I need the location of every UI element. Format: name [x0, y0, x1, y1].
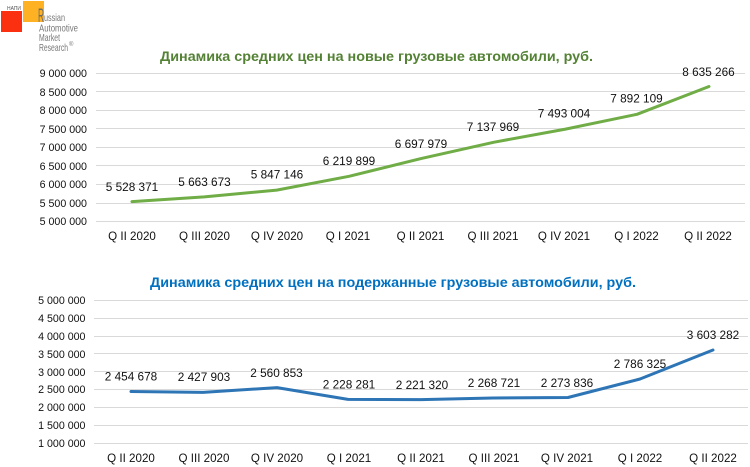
y axis labels: new trucks: 9 000 000: [40, 68, 87, 80]
x axis labels: used trucks: Q IV 2021: [541, 452, 593, 465]
x axis labels: new trucks: Q II 2020: [108, 230, 156, 243]
y axis labels: new trucks: 5 000 000: [40, 216, 87, 228]
x axis labels: new trucks: [108, 230, 732, 243]
panel: used trucks chart: [38, 274, 748, 465]
data labels: new trucks: 6 219 899: [323, 154, 375, 168]
heading: new trucks: Динамика средних цен на новые грузовые автомобили, руб.: [160, 48, 593, 64]
y axis labels: new trucks: 8 000 000: [40, 105, 87, 117]
x axis labels: new trucks: Q IV 2020: [251, 230, 303, 243]
x axis labels: new trucks: Q III 2020: [179, 230, 230, 243]
heading: used trucks: Динамика средних цен на подержанные грузовые автомобили, руб.: [150, 274, 636, 290]
data labels: new trucks: 7 892 109: [610, 92, 663, 106]
data labels: new trucks: 6 697 979: [395, 137, 447, 151]
y axis labels: used trucks: 1 500 000: [38, 420, 86, 432]
y axis labels: used trucks: 2 000 000: [38, 402, 86, 414]
data labels: new trucks: 5 663 673: [178, 175, 231, 189]
data labels: used trucks: 2 560 853: [250, 366, 303, 380]
line: used truck prices: [131, 350, 713, 400]
x axis labels: used trucks: [107, 452, 737, 465]
y axis labels: new trucks: 5 500 000: [40, 198, 87, 210]
y axis labels: used trucks: 4 000 000: [38, 331, 86, 343]
logo: Russian Automotive Market Research: [1, 1, 78, 54]
data labels: new trucks: 5 528 371: [106, 180, 158, 194]
y axis labels: used trucks: 3 500 000: [38, 349, 86, 361]
y axis labels: used trucks: [38, 295, 86, 450]
y axis labels: new trucks: 8 500 000: [40, 87, 87, 99]
x axis labels: new trucks: Q II 2022: [684, 230, 732, 243]
y axis labels: used trucks: 5 000 000: [38, 295, 86, 307]
x axis labels: new trucks: Q I 2021: [326, 230, 370, 243]
y axis labels: new trucks: 6 000 000: [40, 179, 87, 191]
data labels: used trucks: 2 221 320: [396, 378, 449, 392]
data labels: used trucks: 2 427 903: [178, 370, 231, 384]
y axis labels: used trucks: 3 000 000: [38, 367, 86, 379]
logo: Russian Automotive Market Research: НАПИ: [7, 6, 21, 12]
data labels: used trucks: 3 603 282: [687, 328, 739, 342]
data labels: used trucks: 2 786 325: [614, 357, 667, 371]
x axis labels: used trucks: Q I 2021: [327, 452, 371, 465]
y axis labels: used trucks: 1 000 000: [38, 438, 86, 450]
data labels: used trucks: 2 268 721: [468, 376, 520, 390]
x axis labels: used trucks: Q I 2022: [618, 452, 662, 465]
x axis labels: new trucks: Q IV 2021: [538, 230, 590, 243]
x axis labels: used trucks: Q II 2022: [689, 452, 737, 465]
panel: new trucks chart: [40, 48, 745, 243]
data labels: used trucks: 2 273 836: [541, 376, 594, 390]
x axis labels: new trucks: Q II 2021: [397, 230, 444, 243]
data labels: new trucks: 8 635 266: [682, 65, 735, 79]
y axis labels: used trucks: 2 500 000: [38, 384, 86, 396]
y axis labels: new trucks: 7 000 000: [40, 142, 87, 154]
data labels: new trucks: 7 137 969: [467, 120, 519, 134]
x axis labels: new trucks: Q III 2021: [468, 230, 518, 243]
y axis labels: new trucks: 6 500 000: [40, 161, 87, 173]
logo: Russian Automotive Market Research: ussian: [44, 12, 65, 24]
x axis labels: used trucks: Q II 2020: [107, 452, 155, 465]
data labels: new trucks: [106, 65, 735, 194]
y axis labels: used trucks: 4 500 000: [38, 313, 86, 325]
x axis labels: new trucks: Q I 2022: [614, 230, 659, 243]
logo: Russian Automotive Market Research: Research: [39, 42, 68, 54]
data labels: new trucks: 7 493 004: [538, 106, 591, 120]
x axis labels: used trucks: Q III 2020: [179, 452, 229, 465]
x axis labels: used trucks: Q IV 2020: [251, 452, 303, 465]
logo: Russian Automotive Market Research: ®: [69, 41, 74, 48]
data labels: used trucks: 2 454 678: [105, 370, 158, 384]
data labels: new trucks: 5 847 146: [251, 168, 304, 182]
logo: Russian Automotive Market Research: R: [38, 6, 44, 27]
data labels: used trucks: [105, 328, 739, 392]
logo: Russian Automotive Market Research: Automotive: [39, 22, 78, 34]
data labels: used trucks: 2 228 281: [323, 378, 375, 392]
x axis labels: used trucks: Q II 2021: [397, 452, 445, 465]
y axis labels: new trucks: 7 500 000: [40, 124, 87, 136]
x axis labels: used trucks: Q III 2021: [469, 452, 519, 465]
logo: Russian Automotive Market Research: Market: [39, 32, 60, 44]
line: new truck prices: [132, 86, 709, 202]
y axis labels: new trucks: [40, 68, 87, 228]
